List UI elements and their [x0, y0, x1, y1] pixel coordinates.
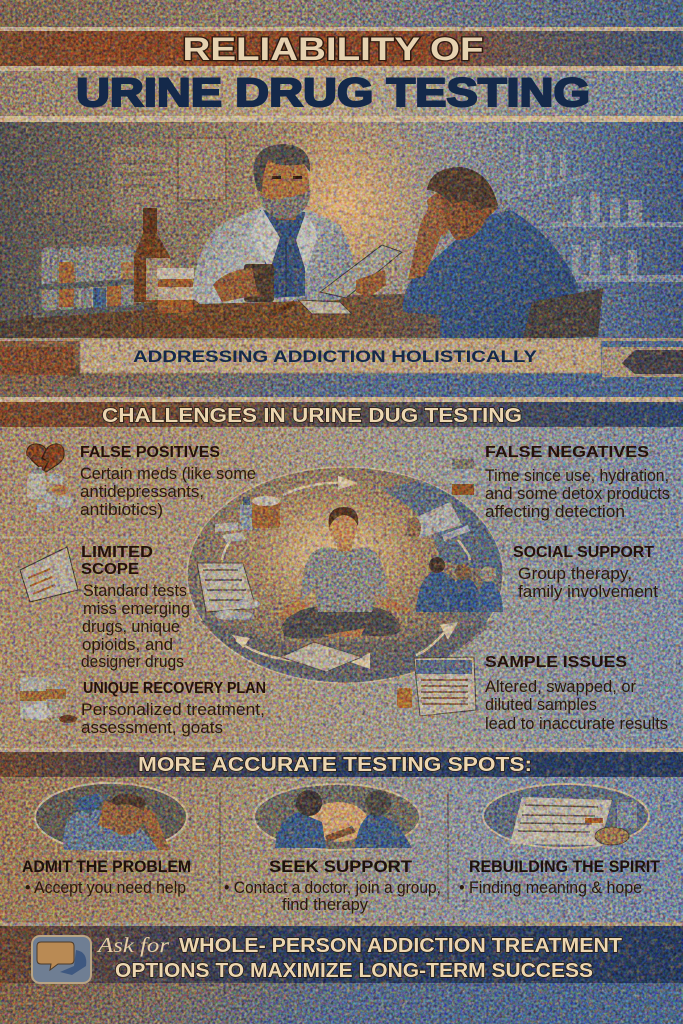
rebuilding the spirit text: [459, 858, 660, 897]
unique recovery plan text: assessment, goats: [81, 719, 223, 737]
bottom background: [0, 922, 683, 1024]
cycle arrows: [222, 483, 470, 661]
false positives text: antidepressants,: [80, 483, 204, 501]
challenges header band: [0, 397, 683, 427]
top strip: [0, 0, 683, 27]
limited scope text: opioids, and: [82, 636, 173, 654]
limited scope text: designer drugs: [81, 653, 184, 671]
false negatives icon: pill bottle: [452, 459, 474, 495]
limited scope text: Standard tests: [83, 582, 187, 600]
group of people: [416, 557, 503, 612]
more accurate header band: [0, 748, 683, 777]
patient: [403, 167, 580, 338]
unique recovery plan text: UNIQUE RECOVERY PLAN: [83, 680, 266, 697]
seek support text: [224, 858, 441, 914]
ribbon main: [80, 339, 601, 373]
false positives text: Certain meds (like some: [80, 465, 256, 483]
column dividers: [220, 792, 448, 903]
false positives text: [80, 444, 256, 519]
limited scope text: miss emerging: [83, 600, 190, 618]
central circle illustration: meditating person: [187, 467, 503, 683]
limited scope text: drugs, unique: [82, 618, 180, 636]
limited scope text: LIMITED: [81, 544, 153, 561]
faint dividers: [0, 536, 683, 538]
title: [76, 31, 590, 115]
ribbon tail right: [602, 347, 683, 377]
ribbon tail right dark: [622, 350, 683, 374]
limited scope icon: drug test booklet: [20, 547, 78, 602]
limited scope text: [81, 544, 190, 671]
pharmacy shelves: [500, 150, 683, 282]
lower three-column panel background: [0, 777, 683, 926]
false positives text: antibiotics): [80, 501, 163, 519]
person: [277, 507, 412, 639]
call to action band: [0, 922, 683, 983]
title: RELIABILITY OF: [182, 31, 484, 67]
tipped bottle: [407, 502, 470, 541]
hero illustration: doctor and patient: [0, 115, 683, 338]
sample issues text: lead to inaccurate results: [485, 715, 668, 733]
oval illustration: meaning and hope document: [483, 784, 649, 848]
ribbon fold shadows: [62, 363, 80, 381]
pill jar: [157, 268, 194, 313]
notepad and pen: [268, 300, 352, 317]
sample issues icon: lab report and cup: [397, 657, 476, 716]
limited scope text: SCOPE: [81, 561, 139, 578]
call to action text: WHOLE- PERSON ADDICTION TREATMENT: [179, 935, 622, 957]
doctor: [192, 144, 402, 304]
seek support text: • Contact a doctor, join a group,: [224, 879, 441, 897]
unique recovery plan text: [81, 680, 266, 737]
sample issues text: diluted samples: [485, 696, 597, 714]
title band: tan: [0, 66, 683, 122]
false negatives text: affecting detection: [485, 503, 625, 521]
oval illustration: head in hands: [35, 783, 187, 851]
challenges heading: CHALLENGES IN URINE DUG TESTING: [102, 405, 522, 427]
chair: [523, 288, 603, 338]
title band: red: [0, 27, 683, 66]
more accurate heading: MORE ACCURATE TESTING SPOTS:: [138, 754, 532, 776]
false negatives text: Time since use, hydration,: [485, 467, 669, 485]
seek support text: find therapy: [282, 896, 369, 914]
test tube rack: [33, 246, 144, 318]
false negatives text: and some detox products: [485, 485, 670, 503]
social support text: Group therapy,: [518, 565, 632, 583]
oval illustration: two people talking: [254, 784, 420, 850]
challenges panel background: [0, 427, 683, 750]
rebuilding the spirit text: REBUILDING THE SPIRIT: [469, 858, 660, 876]
call to action text: [96, 933, 622, 982]
subtitle ribbon text: ADDRESSING ADDICTION HOLISTICALLY: [133, 347, 538, 366]
ribbon tail left: [0, 347, 75, 375]
false positives text: FALSE POSITIVES: [80, 444, 220, 461]
sample issues text: Altered, swapped, or: [485, 678, 636, 696]
wall posters: [40, 138, 226, 220]
report and pills: [197, 563, 260, 620]
seek support text: SEEK SUPPORT: [269, 858, 412, 876]
bottle and jars: [215, 496, 280, 542]
admit the problem text: ADMIT THE PROBLEM: [22, 858, 191, 876]
admit the problem text: • Accept you need help: [25, 879, 186, 897]
rebuilding the spirit text: • Finding meaning & hope: [459, 879, 642, 897]
unique recovery plan text: Personalized treatment,: [81, 701, 265, 719]
brown bottle: [134, 208, 170, 302]
ribbon band: [0, 338, 683, 400]
social support text: SOCIAL SUPPORT: [513, 544, 654, 561]
unique recovery plan icon: jars and pills: [20, 675, 77, 723]
social support text: family involvement: [518, 583, 658, 601]
sample issues text: [485, 654, 668, 733]
admit the problem text: [22, 858, 191, 897]
false negatives text: FALSE NEGATIVES: [485, 444, 649, 461]
paper on floor: [281, 642, 362, 672]
social support text: [513, 544, 658, 601]
title: URINE DRUG TESTING: [76, 71, 590, 115]
false positives icon: broken heart with pills: [27, 444, 73, 512]
false negatives text: [485, 444, 670, 521]
call to action text: OPTIONS TO MAXIMIZE LONG-TERM SUCCESS: [115, 960, 593, 982]
icon: speech bubbles: [32, 936, 91, 983]
call to action text: Ask for: [96, 933, 170, 957]
sample issues text: SAMPLE ISSUES: [485, 654, 627, 671]
table: [0, 294, 520, 338]
